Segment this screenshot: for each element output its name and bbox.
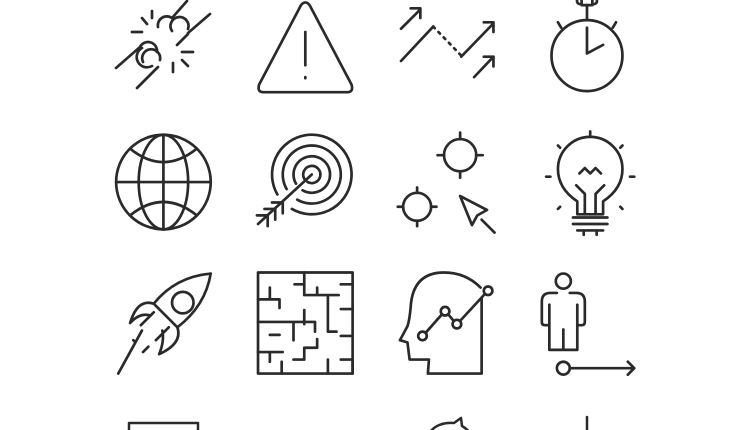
icon: broken chain xyxy=(116,1,210,88)
row 2 icons xyxy=(116,132,634,235)
row 3 icons xyxy=(118,272,634,375)
icon: rocket xyxy=(118,274,211,374)
icon: zigzag arrows xyxy=(401,8,493,77)
icon: light bulb xyxy=(546,132,634,235)
icon: maze xyxy=(258,272,353,374)
icon: target with arrow xyxy=(257,135,352,226)
icon: partial line (cut off) xyxy=(586,417,588,430)
icon: globe xyxy=(116,135,211,229)
icon: partial box (cut off) xyxy=(129,423,198,430)
icon: head with growth chart xyxy=(400,272,492,374)
icon: warning triangle xyxy=(259,2,352,92)
icon: stopwatch xyxy=(552,0,622,91)
icon: partial speech bubble (cut off) xyxy=(430,418,469,430)
row 1 icons xyxy=(259,0,622,92)
icon: crosshairs and cursor xyxy=(398,133,495,233)
icon: person with timeline xyxy=(542,274,634,375)
